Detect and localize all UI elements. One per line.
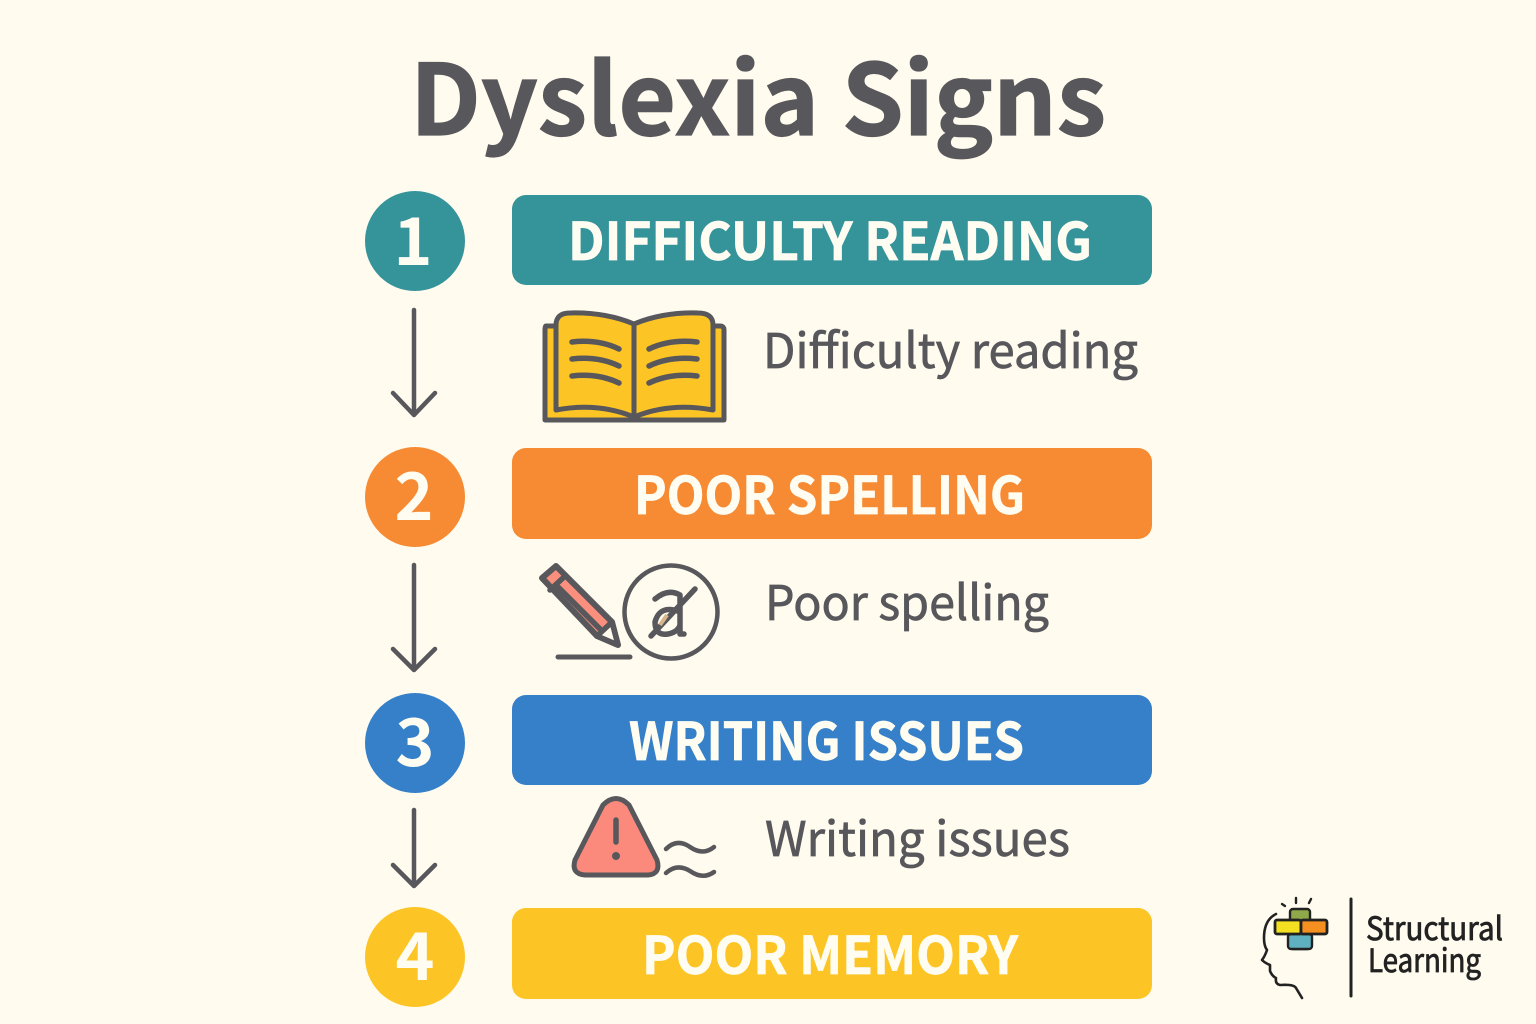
logo text: Learning bbox=[1368, 936, 1481, 982]
icon: open book bbox=[545, 313, 724, 420]
logo divider bbox=[1350, 899, 1352, 996]
step 1 heading bar bbox=[512, 195, 1152, 285]
arrow 2 to 3 bbox=[393, 565, 435, 670]
step 4 number badge bbox=[365, 904, 465, 1007]
logo text bbox=[1366, 904, 1503, 982]
description 1: Difficulty reading bbox=[763, 312, 1138, 382]
logo text: Structural bbox=[1366, 904, 1503, 950]
step 2 number badge: 2 bbox=[395, 444, 433, 540]
arrow 3 to 4 bbox=[393, 810, 435, 886]
step 2 heading bar: POOR SPELLING bbox=[634, 454, 1025, 529]
title: Dyslexia Signs bbox=[410, 22, 1106, 164]
step 4 number badge: 4 bbox=[396, 904, 434, 1000]
step 1 number badge: 1 bbox=[394, 189, 432, 285]
step 3 number badge: 3 bbox=[396, 690, 434, 786]
description 3: Writing issues bbox=[765, 800, 1070, 870]
step 4 heading bar bbox=[512, 908, 1152, 999]
step 3 number badge bbox=[365, 690, 465, 793]
icon: pencil and crossed letter bbox=[542, 566, 718, 658]
step 4 heading bar: POOR MEMORY bbox=[642, 914, 1019, 989]
step 1 heading bar: DIFFICULTY READING bbox=[568, 200, 1092, 275]
icon: head with blocks bbox=[1262, 898, 1327, 998]
logo: Structural Learning bbox=[1262, 898, 1503, 998]
icon: warning triangle with waves bbox=[574, 798, 714, 876]
step 3 heading bar: WRITING ISSUES bbox=[629, 700, 1024, 775]
description 2: Poor spelling bbox=[765, 564, 1049, 634]
arrow 1 to 2 bbox=[393, 310, 435, 415]
step 2 heading bar bbox=[512, 448, 1152, 539]
step 1 number badge bbox=[365, 189, 465, 291]
step 2 number badge bbox=[365, 444, 465, 547]
step 3 heading bar bbox=[512, 695, 1152, 785]
